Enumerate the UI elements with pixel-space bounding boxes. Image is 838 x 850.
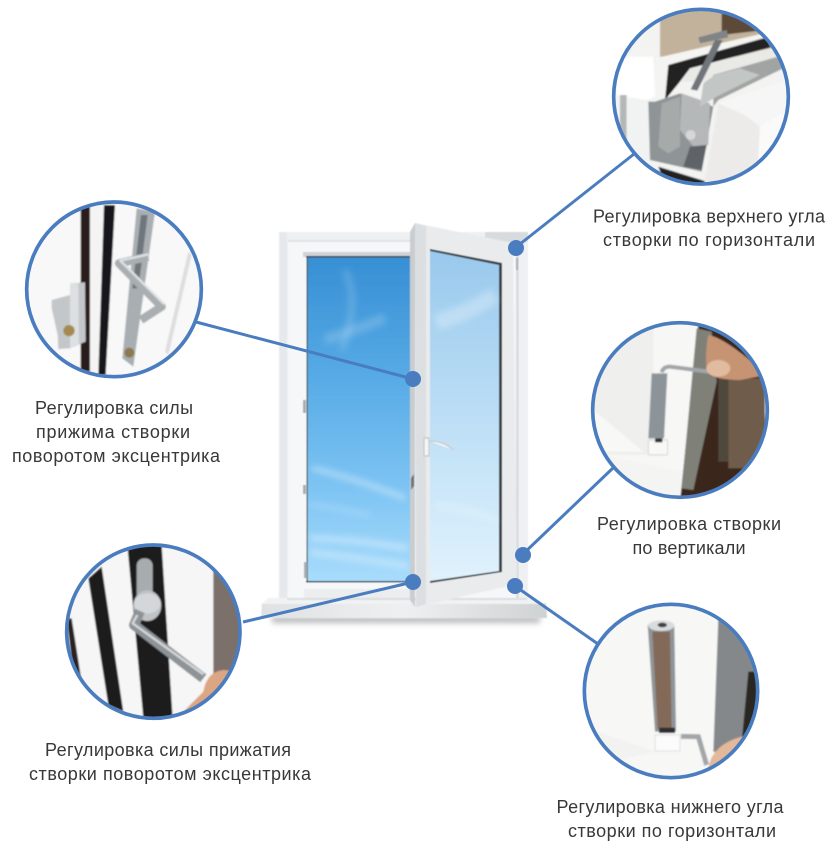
- marker: vertical adjustment: [515, 547, 531, 563]
- caption: pressing force: Регулировка силы прижатия: [45, 740, 291, 760]
- caption: pressing force: [29, 740, 312, 784]
- photo circle: eccentric with hex key: [25, 202, 205, 382]
- opened window sash: [410, 223, 517, 607]
- marker: pressure eccentric upper: [405, 371, 421, 387]
- photo circle: vertical adjustment: [590, 322, 770, 502]
- caption: vertical adjustment: Регулировка створки: [597, 514, 781, 534]
- hardware details on frame: [303, 258, 518, 578]
- photo circle: eccentric turned by key: [65, 543, 243, 722]
- left window pane with sky: [306, 256, 411, 582]
- caption: upper corner: [593, 206, 826, 250]
- photo circle: lower hinge: [582, 602, 762, 782]
- window frame: [279, 232, 528, 600]
- marker: upper corner: [508, 240, 524, 256]
- caption: upper corner: Регулировка верхнего угла: [593, 206, 826, 226]
- marker: lower corner: [507, 578, 523, 594]
- caption: pressure force: Регулировка силы: [35, 398, 193, 418]
- photo circle: upper hinge: [610, 7, 793, 190]
- caption: pressure force: [12, 398, 221, 466]
- window handle: [424, 438, 453, 456]
- marker: pressure eccentric lower: [405, 574, 421, 590]
- caption: lower corner: створки по горизонтали: [568, 821, 776, 841]
- caption: vertical adjustment: [597, 514, 781, 558]
- window illustration: [261, 223, 547, 623]
- caption: lower corner: [556, 797, 784, 841]
- caption: pressing force: створки поворотом эксцентрика: [29, 764, 312, 784]
- caption: pressure force: прижима створки: [36, 422, 190, 442]
- caption: vertical adjustment: по вертикали: [632, 538, 746, 558]
- caption: lower corner: Регулировка нижнего угла: [556, 797, 784, 817]
- caption: pressure force: поворотом эксцентрика: [12, 446, 221, 466]
- connector lines: [196, 154, 634, 644]
- window sill: [261, 596, 547, 623]
- caption: upper corner: створки по горизонтали: [603, 230, 815, 250]
